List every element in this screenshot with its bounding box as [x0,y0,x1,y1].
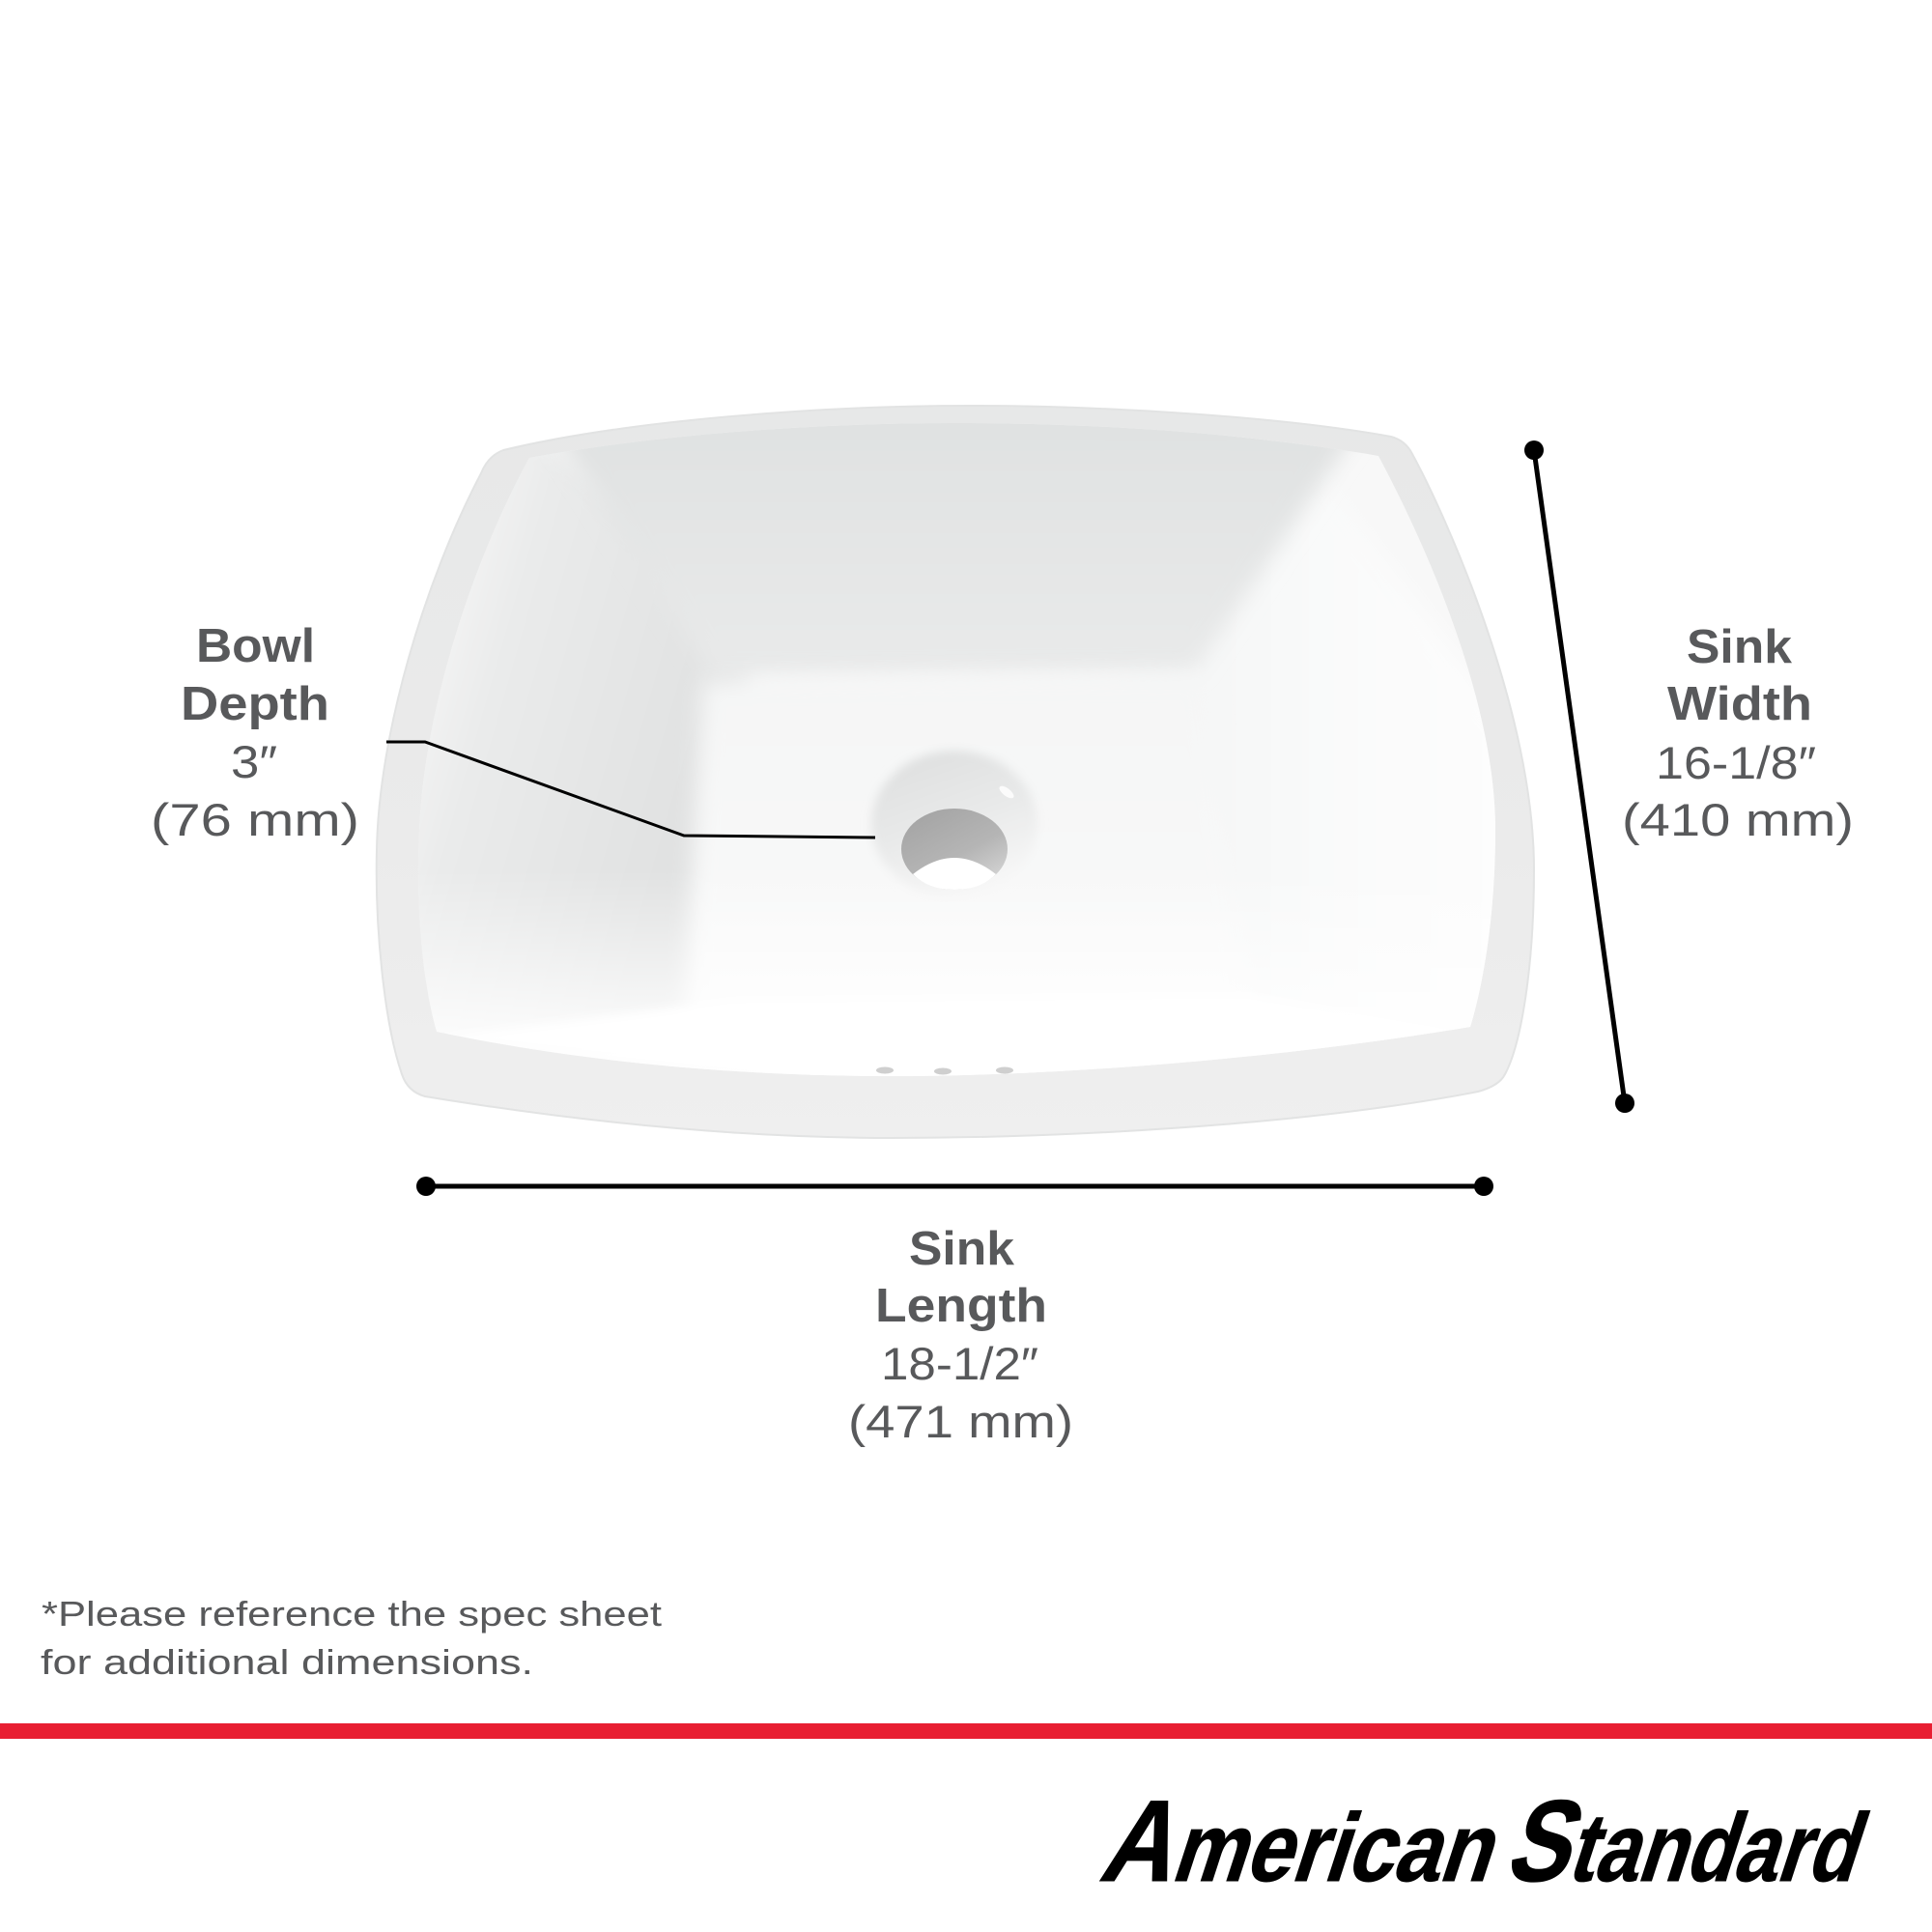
sink width label: (410 mm) [1622,794,1854,845]
sink length label: (471 mm) [848,1396,1073,1447]
sink width dimension arrow [1524,440,1634,1113]
sink length label: 18-1/2″ [881,1338,1038,1389]
bowl depth label: Bowl [196,620,315,672]
American Standard logo [1089,1777,1887,1906]
sink rim [377,406,1534,1138]
sink width label [1622,621,1854,845]
drain [871,751,1037,897]
sink width label: Sink [1687,621,1793,673]
sink length label: Length [875,1280,1047,1332]
sink width label: 16-1/8″ [1656,737,1816,788]
bowl depth leader line [386,742,875,838]
bowl depth label [151,620,359,845]
sink length label [848,1223,1073,1447]
sink length label: Sink [909,1223,1015,1275]
sink length dimension arrow [416,1177,1493,1196]
footnote [41,1594,662,1682]
sink bowl [424,426,1495,1076]
bowl depth label: (76 mm) [151,794,359,845]
sink width label: Width [1667,678,1812,730]
faucet holes [876,1066,1013,1074]
footnote: for additional dimensions. [41,1642,533,1682]
bowl depth label: 3″ [231,736,277,787]
American Standard logo: American [1089,1777,1521,1906]
bowl depth label: Depth [181,678,329,730]
sink illustration [377,386,1546,1138]
footnote: *Please reference the spec sheet [42,1594,662,1634]
red divider band [0,1723,1932,1739]
